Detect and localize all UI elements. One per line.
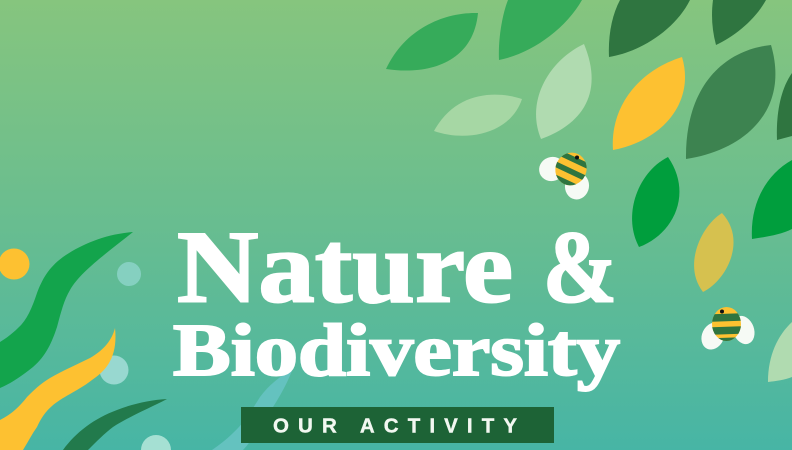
decorative dots (0, 248, 171, 450)
title (173, 210, 620, 392)
leaf: mid green top (499, 0, 582, 60)
bee wings (536, 153, 591, 201)
leaf: olive yellow (694, 213, 734, 292)
banner text: OUR ACTIVITY (273, 414, 517, 438)
leaf: pale vertical (536, 44, 592, 139)
bee eye (720, 310, 724, 314)
wave: teal (212, 368, 293, 450)
leaf: dark green top (609, 0, 690, 57)
bee wings (697, 313, 758, 353)
title line 1: word: Nature (177, 210, 513, 324)
wave: dark green (63, 399, 167, 450)
title line 2: Biodiversity (173, 310, 620, 392)
bee stripes (556, 153, 587, 186)
leaf: pale horizontal (434, 95, 522, 136)
leaf: mid green left (386, 13, 478, 71)
subtitle banner (241, 407, 554, 443)
leaf: dark green right edge (777, 73, 792, 140)
title line 1: ampersand: & (543, 210, 617, 324)
bee body (712, 307, 741, 341)
bee lower (701, 307, 754, 350)
leaf: vivid green (632, 157, 679, 247)
wave: green (0, 232, 133, 388)
bee eye (575, 156, 579, 160)
leaf: dark green top right (712, 0, 766, 45)
bee body (550, 147, 592, 191)
leaf cluster (386, 0, 792, 382)
leaf: yellow (613, 57, 685, 150)
leaf: pale bottom right (768, 322, 792, 382)
leaf: vivid green right edge (752, 160, 792, 239)
leaf: large muted green (686, 45, 775, 159)
banner box (241, 407, 554, 443)
bee upper (539, 152, 589, 200)
bee stripes (710, 317, 743, 342)
wave: yellow (0, 328, 115, 450)
